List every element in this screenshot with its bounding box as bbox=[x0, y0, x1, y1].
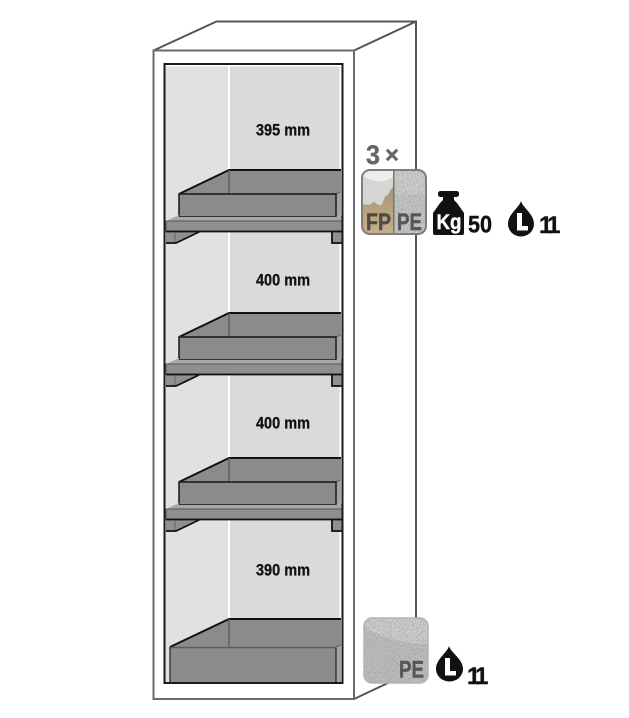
shelf with tray, 395 mm compartment bbox=[166, 170, 342, 243]
icon: weight Kg: Kg bbox=[436, 211, 462, 234]
badge: FP and PE trays: FP bbox=[366, 209, 391, 236]
shelf with tray, second 400 mm compartment bbox=[166, 458, 342, 531]
icon: drop L, shelf bbox=[508, 201, 534, 236]
cabinet interior bbox=[165, 64, 342, 683]
quantity label 3x: 3 bbox=[366, 140, 380, 170]
cabinet body bbox=[154, 22, 416, 699]
weight capacity 50: 50 bbox=[468, 212, 492, 238]
quantity label 3x: × bbox=[385, 142, 399, 169]
bottom volume 11 bbox=[467, 663, 488, 690]
shelf volume 11: 1 bbox=[539, 212, 552, 239]
interior frame outline bbox=[164, 64, 342, 683]
cabinet infographic bbox=[152, 20, 560, 700]
shelf volume 11 bbox=[539, 212, 560, 239]
shelf with tray, 400 mm compartment bbox=[166, 313, 342, 386]
badge: FP and PE trays: PE bbox=[397, 209, 422, 236]
quantity label 3x bbox=[366, 140, 399, 170]
icon: weight Kg bbox=[433, 191, 464, 235]
badge: PE bottom tray: PE bbox=[399, 656, 424, 684]
bottom sump tray bbox=[170, 619, 341, 683]
bottom volume 11: 1 bbox=[467, 663, 480, 690]
compartment heights: 395 mm bbox=[256, 120, 310, 140]
shelf volume 11: 1 bbox=[547, 212, 560, 239]
compartment heights bbox=[256, 120, 310, 580]
compartment heights: 390 mm bbox=[256, 560, 310, 580]
compartment heights: 400 mm bbox=[256, 414, 310, 432]
badge: PE bottom tray bbox=[364, 618, 428, 684]
bottom volume 11: 1 bbox=[475, 663, 488, 690]
compartment heights: 400 mm bbox=[256, 270, 310, 290]
badge: FP and PE trays bbox=[362, 170, 426, 236]
icon: drop L, bottom bbox=[436, 646, 463, 682]
